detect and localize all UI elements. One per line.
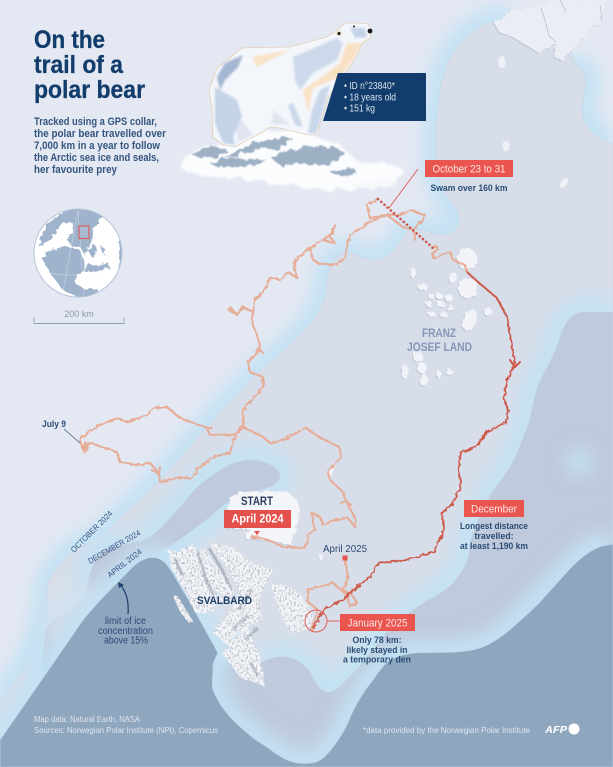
callout: December: travelled: [474, 531, 514, 542]
intro text: her favourite prey [34, 164, 118, 176]
callout: January 2025: Only 78 km: [352, 635, 402, 646]
annotation: limit of ice concentration: above 15% [104, 636, 148, 646]
callout: July 9: July 9 [42, 419, 66, 430]
pale track: end of journey [308, 246, 467, 630]
bear body [209, 23, 372, 147]
locator globe [34, 208, 124, 299]
dotted swim segment [378, 199, 433, 248]
callout: December [460, 500, 528, 552]
intro text: the Arctic sea ice and seals, [34, 152, 159, 164]
locator rectangle [79, 226, 89, 238]
callout: January 2025 [305, 610, 415, 666]
pale track line [80, 199, 425, 548]
callout: October 23 to 31 [389, 160, 513, 208]
direction arrow, dark [510, 360, 520, 367]
end marker: April 2025: April 2025 [323, 543, 367, 555]
scale bar: 200 km [64, 309, 94, 319]
title: trail of a [34, 51, 124, 79]
Spitsbergen and Nordaustlandet [168, 542, 317, 687]
land: Franz Josef Land [402, 248, 492, 386]
end marker: April 2025 [323, 543, 367, 560]
ice limit label: October 2024: OCTOBER 2024 [69, 509, 115, 554]
ice limit label: December 2024: DECEMBER 2024 [86, 528, 143, 566]
intro text [34, 116, 167, 176]
intro text: the polar bear travelled over [34, 128, 167, 140]
callout: January 2025: likely stayed in [346, 645, 408, 656]
ice limit region: April 2024 [0, 544, 613, 767]
title [34, 26, 145, 104]
callout: December: Longest distance [460, 521, 528, 532]
title: On the [34, 26, 105, 54]
bear track: April to October [80, 199, 467, 630]
sources: Sources: Norwegian Polar Institute (NPI), Copernicus [34, 725, 218, 735]
info box: bear ID: • 151 kg [344, 104, 375, 114]
start label: START [241, 496, 273, 508]
callout: December: at least 1,190 km [460, 541, 528, 552]
annotation: limit of ice concentration [98, 582, 153, 646]
info box: bear ID [323, 73, 426, 121]
bear track: November to January [313, 272, 520, 627]
sources: Map data: Natural Earth, NASA [34, 714, 140, 724]
bear face [336, 26, 372, 36]
place label: Franz Josef Land [407, 326, 472, 354]
lighter tail of the December limit [29, 569, 115, 661]
land: Svalbard [168, 463, 336, 687]
direction arrows, pale [152, 348, 351, 505]
Kvitoya / north-east island [226, 491, 300, 545]
ice limit label: April 2024: APRIL 2024 [106, 547, 144, 580]
callout: January 2025: January 2025 [348, 618, 408, 630]
bear illustration [178, 23, 403, 190]
ice limit glow: December 2024 [43, 312, 613, 692]
AFP logo: AFP [544, 724, 568, 736]
intro text: 7,000 km in a year to follow [34, 140, 160, 152]
sources [34, 714, 218, 735]
ice limit region: December 2024 [43, 312, 613, 767]
place label: Svalbard: SVALBARD [197, 595, 252, 607]
annotation: limit of ice concentration: limit of ice [105, 616, 146, 627]
callout: July 9 [42, 419, 80, 443]
start label [224, 496, 291, 535]
land: northern islands, top right [494, 0, 606, 190]
callout: October 23 to 31: Swam over 160 km [430, 183, 508, 194]
small islets near April 2025 [318, 463, 336, 561]
start label: April 2024 [232, 512, 284, 526]
ice limit glow: April 2024 [0, 544, 613, 764]
callout: December: December [471, 504, 517, 516]
fjords [205, 590, 241, 640]
callout: January 2025: a temporary den [343, 654, 411, 666]
info box: bear ID: • 18 years old [344, 92, 396, 104]
data note: *data provided by the Norwegian Polar Institute [363, 725, 530, 735]
place label: Franz Josef Land: JOSEF LAND [407, 340, 472, 354]
title: polar bear [34, 76, 145, 104]
AFP logo [544, 724, 580, 736]
mountain shading [175, 548, 258, 676]
pale ice patch [566, 449, 592, 475]
annotation: limit of ice concentration: concentration [98, 626, 153, 637]
callout: October 23 to 31: October 23 to 31 [432, 164, 506, 176]
intro text: Tracked using a GPS collar, [34, 116, 157, 128]
info box: bear ID: • ID n°23840* [344, 81, 395, 92]
ice floe and snow [178, 128, 403, 190]
scale bar [34, 309, 124, 324]
place label: Franz Josef Land: FRANZ [422, 326, 456, 340]
